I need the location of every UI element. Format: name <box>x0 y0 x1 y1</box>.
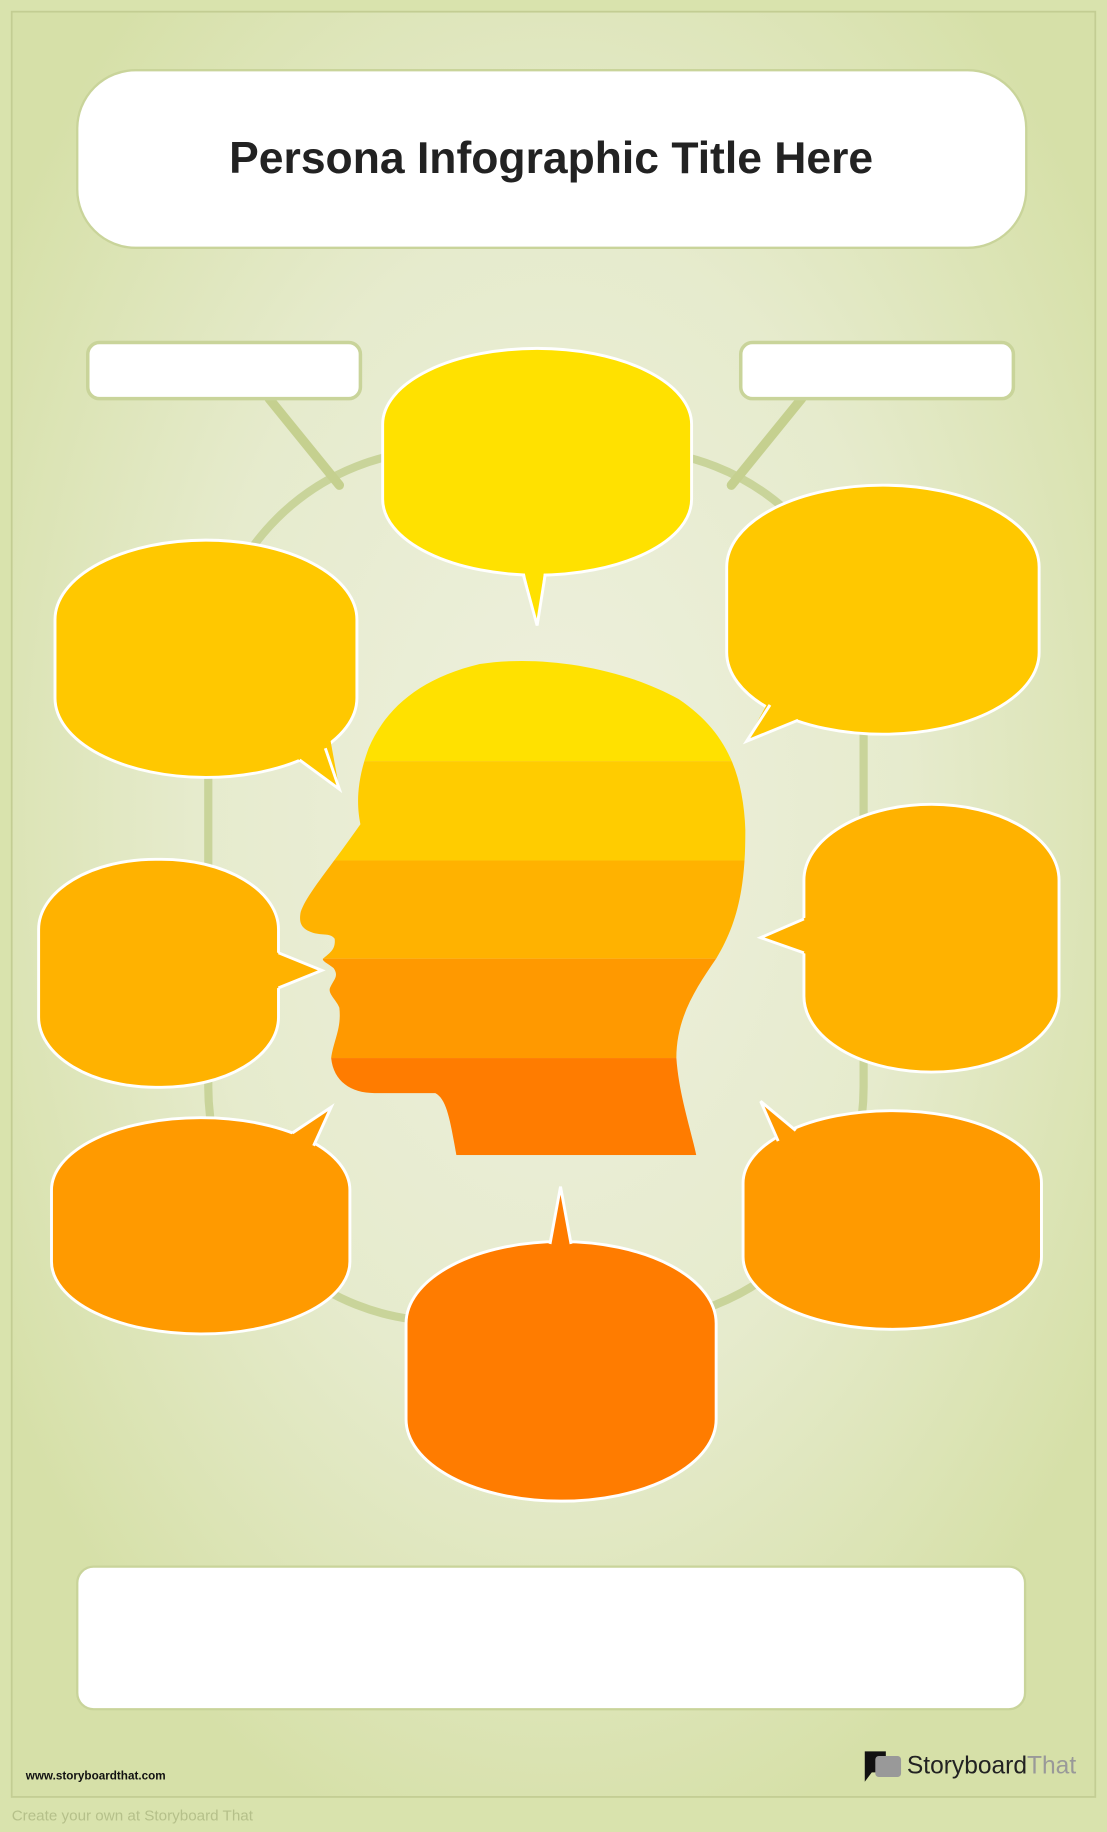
head silhouette <box>281 655 761 1157</box>
title box <box>77 70 1026 248</box>
credit: Create your own at Storyboard That <box>12 1807 254 1824</box>
connector lines to label boxes <box>269 399 802 485</box>
bubble: left top <box>55 540 357 789</box>
ring connecting bubbles <box>208 450 864 1321</box>
footer url: www.storyboardthat.com <box>25 1769 166 1782</box>
label box left <box>88 343 360 399</box>
bubble: left bottom <box>51 1107 350 1334</box>
bubble: right middle <box>761 804 1059 1072</box>
label box right <box>741 343 1013 399</box>
bubble: bottom <box>406 1187 716 1501</box>
bubble: right bottom <box>743 1101 1041 1329</box>
bubble: top <box>383 348 692 625</box>
bubble: left middle <box>39 859 322 1087</box>
bottom text box <box>77 1567 1025 1709</box>
bubble: right top <box>727 485 1039 741</box>
title: Persona Infographic Title Here <box>229 134 873 183</box>
logo: StoryboardThat <box>907 1753 1076 1780</box>
